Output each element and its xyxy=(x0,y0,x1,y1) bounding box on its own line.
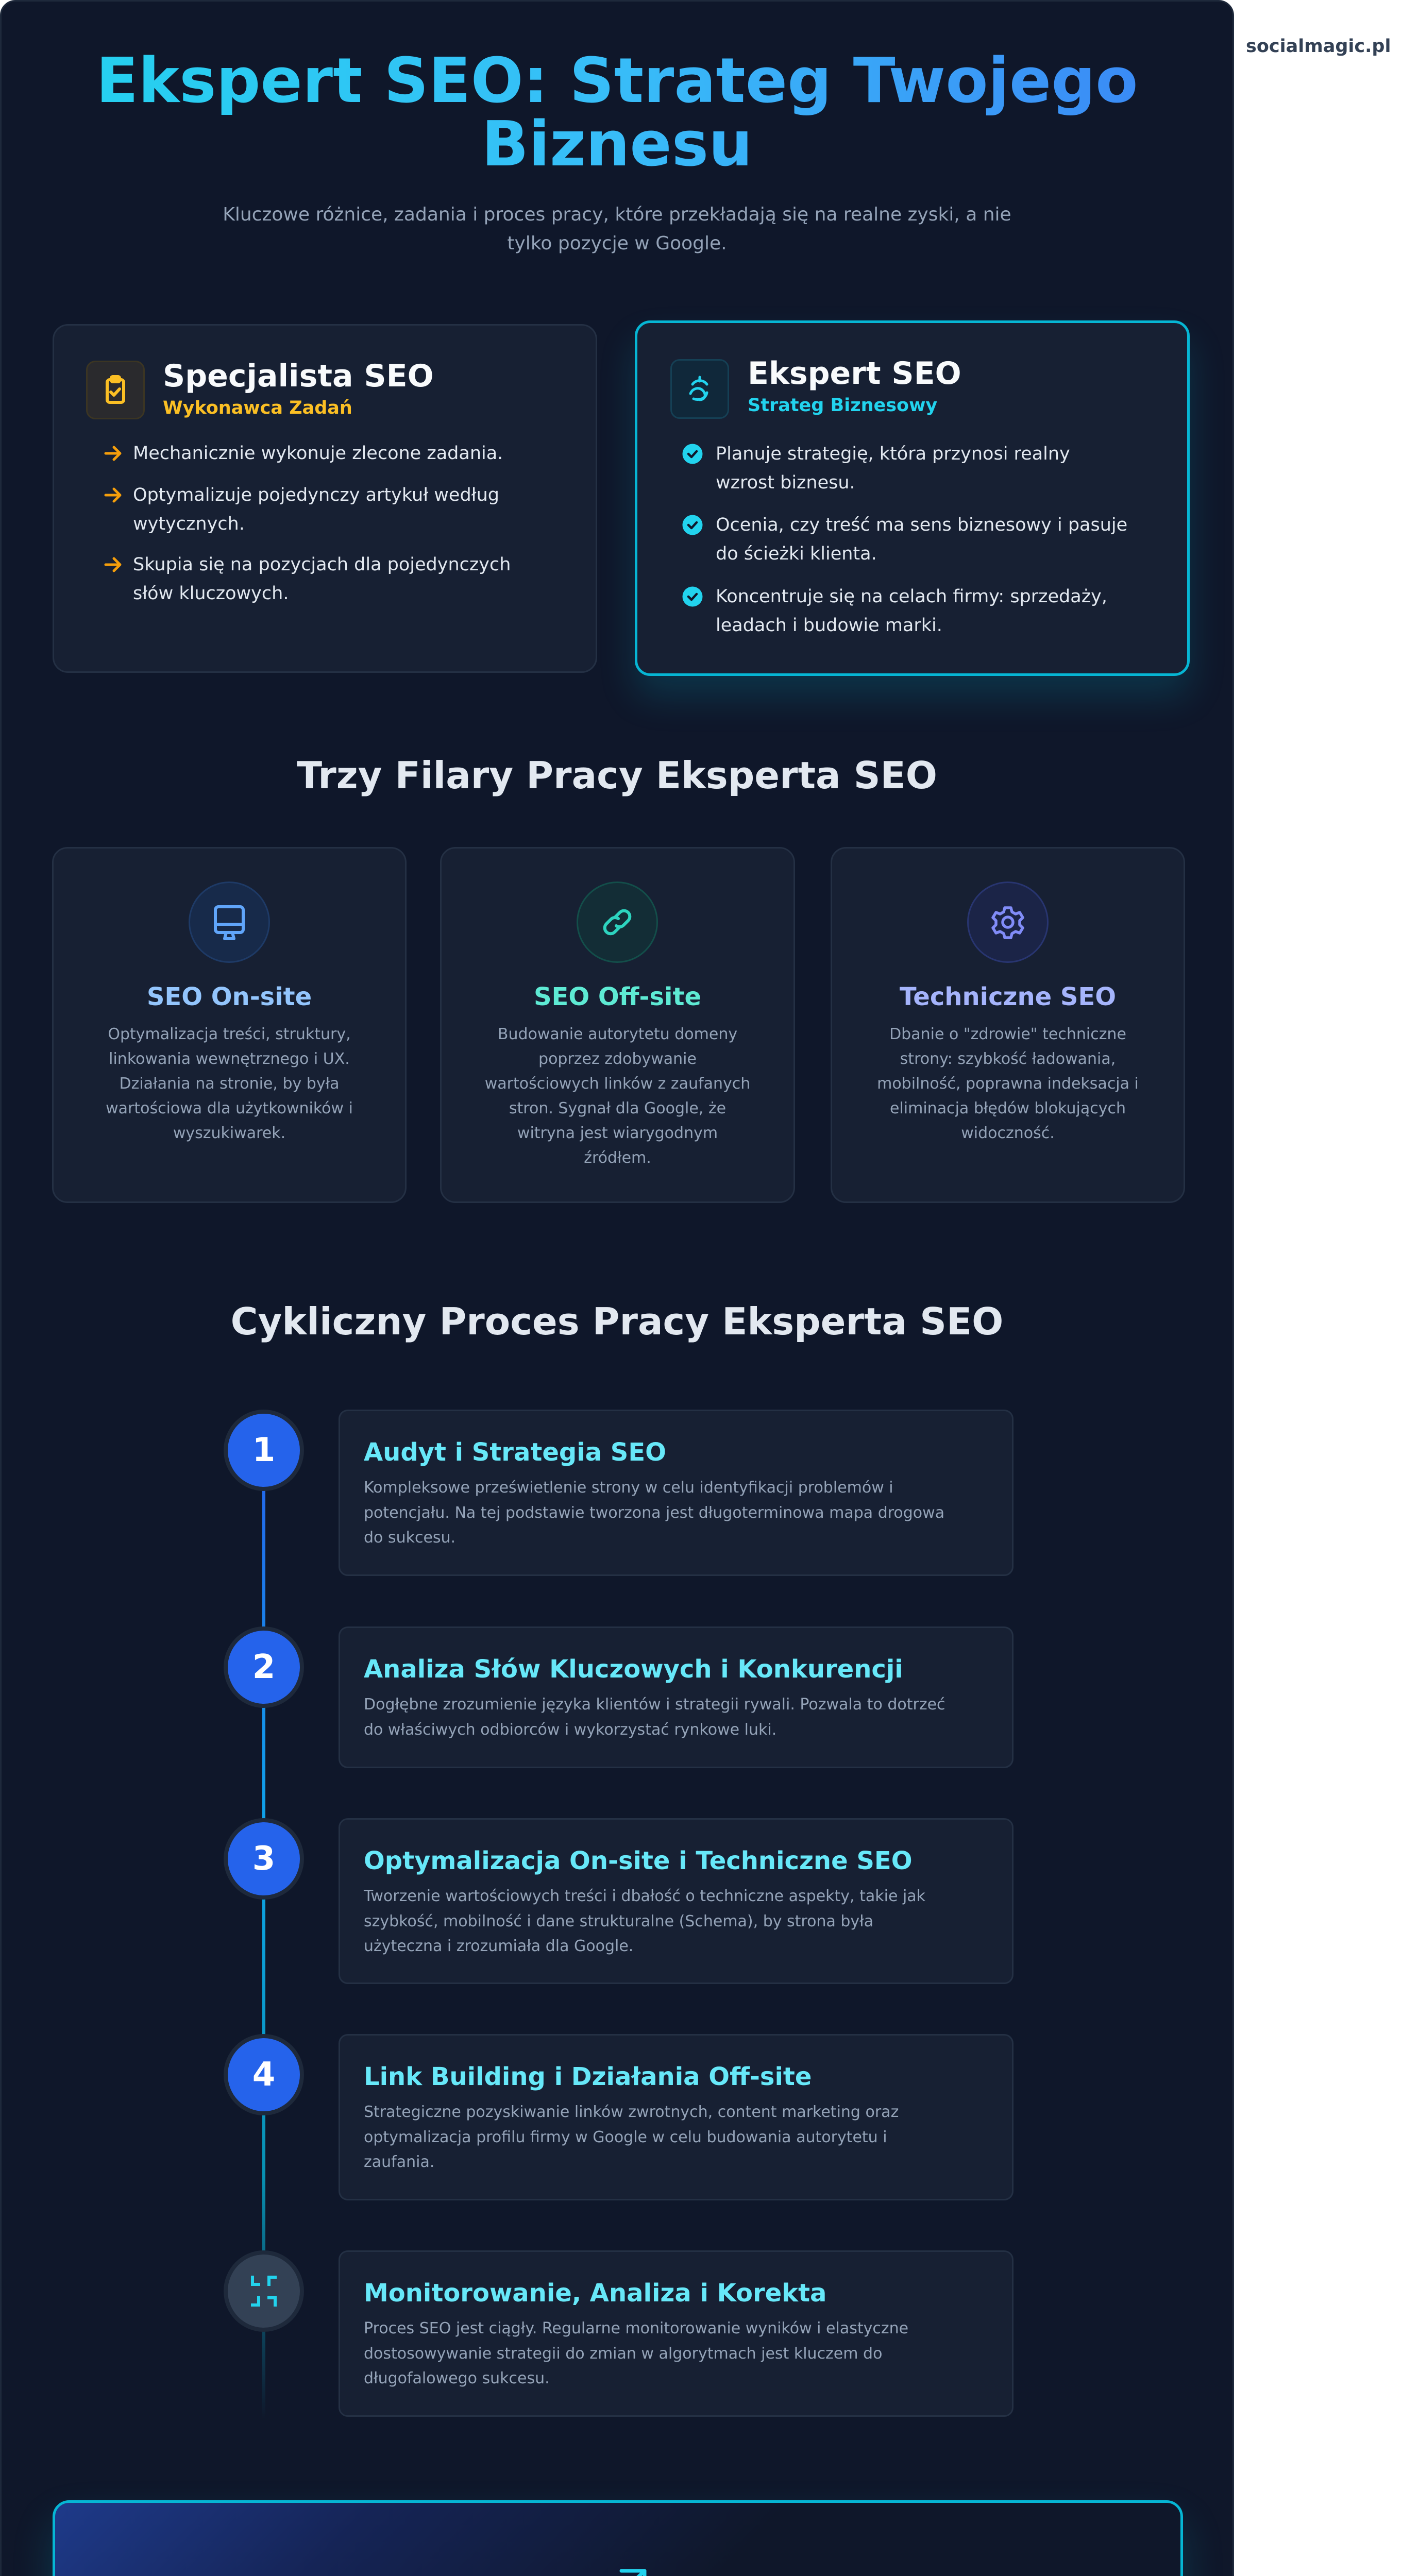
card 3: Tworzenie wartościowych treści i dbałość o techniczne aspekty, takie jak xyxy=(364,1887,925,1905)
title: Ekspert SEO: Strateg Twojego xyxy=(96,45,1138,117)
list: do ścieżki klienta. xyxy=(716,544,877,564)
title xyxy=(0,49,1234,176)
subheading: Wykonawca Zadań xyxy=(163,398,352,418)
badge 4 xyxy=(224,2034,304,2115)
card 1 xyxy=(339,1410,1014,1576)
text: strony: szybkość ładowania, xyxy=(900,1050,1116,1068)
card 3: użyteczna i zrozumiała dla Google. xyxy=(364,1937,633,1955)
text: Budowanie autorytetu domeny xyxy=(498,1025,737,1043)
card 4: Strategiczne pozyskiwanie linków zwrotnych, content marketing oraz xyxy=(364,2103,899,2121)
icon: fingerprint xyxy=(670,359,729,419)
badge 3 xyxy=(224,1818,304,1900)
list xyxy=(682,444,1127,636)
card 1: potencjału. Na tej podstawie tworzona jest długoterminowa mapa drogowa xyxy=(364,1503,944,1522)
text: linkowania wewnętrznego i UX. xyxy=(109,1050,350,1068)
list: Planuje strategię, która przynosi realny xyxy=(716,444,1070,464)
icon: link xyxy=(577,882,658,963)
badge 1: 1 xyxy=(252,1431,275,1469)
badge 4: 4 xyxy=(252,2056,275,2094)
list: Koncentruje się na celach firmy: sprzedaży, xyxy=(716,586,1107,607)
callout: od kosztu do inwestycji xyxy=(53,2500,1183,2576)
subtitle: Kluczowe różnice, zadania i proces pracy, które przekładają się na realne zyski, a nie xyxy=(223,204,1011,225)
subtitle: tylko pozycje w Google. xyxy=(507,233,727,254)
text: wyszukiwarek. xyxy=(173,1124,285,1142)
heading: proces: Cykliczny Proces Pracy Eksperta SEO xyxy=(231,1300,1003,1343)
panel: seo on-site xyxy=(52,847,407,1203)
icon: gear xyxy=(967,882,1049,963)
badge 5: cycle icon xyxy=(224,2250,304,2332)
text: wartościowa dla użytkowników i xyxy=(106,1099,353,1117)
step 3 xyxy=(224,1818,1014,1984)
heading: filary: Trzy Filary Pracy Eksperta SEO xyxy=(297,754,937,797)
card 4: Link Building i Działania Off-site xyxy=(364,2062,812,2091)
card 4: optymalizacja profilu firmy w Google w celu budowania autorytetu i xyxy=(364,2128,887,2146)
text: wartościowych linków z zaufanych xyxy=(485,1075,750,1093)
list: Mechanicznie wykonuje zlecone zadania. xyxy=(133,443,503,464)
icon: clipboard xyxy=(86,361,145,419)
icon: monitor xyxy=(189,882,270,963)
badge 3: 3 xyxy=(252,1840,275,1878)
text: Optymalizacja treści, struktury, xyxy=(108,1025,351,1043)
card 5: dostosowywanie strategii do zmian w algorytmach jest kluczem do xyxy=(364,2344,882,2363)
card 1: Audyt i Strategia SEO xyxy=(364,1438,666,1467)
list: Ocenia, czy treść ma sens biznesowy i pasuje xyxy=(716,515,1127,535)
title: Biznesu xyxy=(481,109,753,180)
card 4: zaufania. xyxy=(364,2153,434,2171)
title: Techniczne SEO xyxy=(900,982,1116,1011)
text: widoczność. xyxy=(961,1124,1055,1142)
step 1 xyxy=(224,1410,1014,1576)
badge 2: 2 xyxy=(252,1648,275,1686)
list: słów kluczowych. xyxy=(133,583,289,604)
title: SEO On-site xyxy=(147,982,312,1011)
card 5: Proces SEO jest ciągły. Regularne monitorowanie wyników i elastyczne xyxy=(364,2319,908,2337)
badge 2 xyxy=(224,1626,304,1708)
text xyxy=(877,1025,1139,1142)
card 5 xyxy=(339,2250,1014,2417)
card 4 xyxy=(339,2034,1014,2200)
text: Dbanie o "zdrowie" techniczne xyxy=(889,1025,1126,1043)
subtitle xyxy=(223,204,1011,254)
step 5 xyxy=(224,2250,1014,2417)
card 5: Monitorowanie, Analiza i Korekta xyxy=(364,2279,826,2308)
card 2: do właściwych odbiorców i wykorzystać rynkowe luki. xyxy=(364,1721,776,1738)
card 3: szybkość, mobilność i dane strukturalne (Schema), by strona była xyxy=(364,1912,873,1930)
text: eliminacja błędów blokujących xyxy=(890,1099,1126,1117)
text: źródłem. xyxy=(584,1149,651,1167)
heading: Ekspert SEO xyxy=(748,355,961,392)
panel: seo off-site xyxy=(440,847,795,1203)
card 1: do sukcesu. xyxy=(364,1529,455,1547)
card 2 xyxy=(339,1626,1014,1768)
card 3 xyxy=(339,1818,1014,1984)
card 1: Kompleksowe prześwietlenie strony w celu identyfikacji problemów i xyxy=(364,1479,893,1497)
badge 1 xyxy=(224,1410,304,1491)
list: Skupia się na pozycjach dla pojedynczych xyxy=(133,554,511,575)
list xyxy=(104,443,511,604)
list: Optymalizuje pojedynczy artykuł według xyxy=(133,485,499,505)
list: leadach i budowie marki. xyxy=(716,615,942,636)
icon: trending up xyxy=(619,2569,646,2576)
timeline line xyxy=(262,1450,265,2419)
text: Działania na stronie, by była xyxy=(119,1075,340,1093)
panel: ekspert xyxy=(635,320,1190,676)
card 5: długofalowego sukcesu. xyxy=(364,2369,550,2387)
heading: Specjalista SEO xyxy=(163,358,434,394)
card 2: Dogłębne zrozumienie języka klientów i strategii rywali. Pozwala to dotrzeć xyxy=(364,1696,945,1714)
text: witryna jest wiarygodnym xyxy=(517,1124,718,1142)
step 4 xyxy=(224,2034,1014,2200)
subheading: Strateg Biznesowy xyxy=(748,395,937,416)
brand top right: socialmagic.pl xyxy=(1246,36,1391,57)
title: SEO Off-site xyxy=(534,982,701,1011)
card 2: Analiza Słów Kluczowych i Konkurencji xyxy=(364,1655,903,1684)
text xyxy=(106,1025,353,1142)
text xyxy=(485,1025,750,1167)
list: wzrost biznesu. xyxy=(716,472,855,493)
list: wytycznych. xyxy=(133,514,245,534)
panel: specjalista xyxy=(53,324,597,673)
step 2 xyxy=(224,1626,1014,1768)
text: stron. Sygnał dla Google, że xyxy=(509,1099,726,1117)
text: poprzez zdobywanie xyxy=(538,1050,697,1068)
text: mobilność, poprawna indeksacja i xyxy=(877,1075,1139,1093)
panel: techniczne seo xyxy=(831,847,1185,1203)
card 3: Optymalizacja On-site i Techniczne SEO xyxy=(364,1846,913,1875)
